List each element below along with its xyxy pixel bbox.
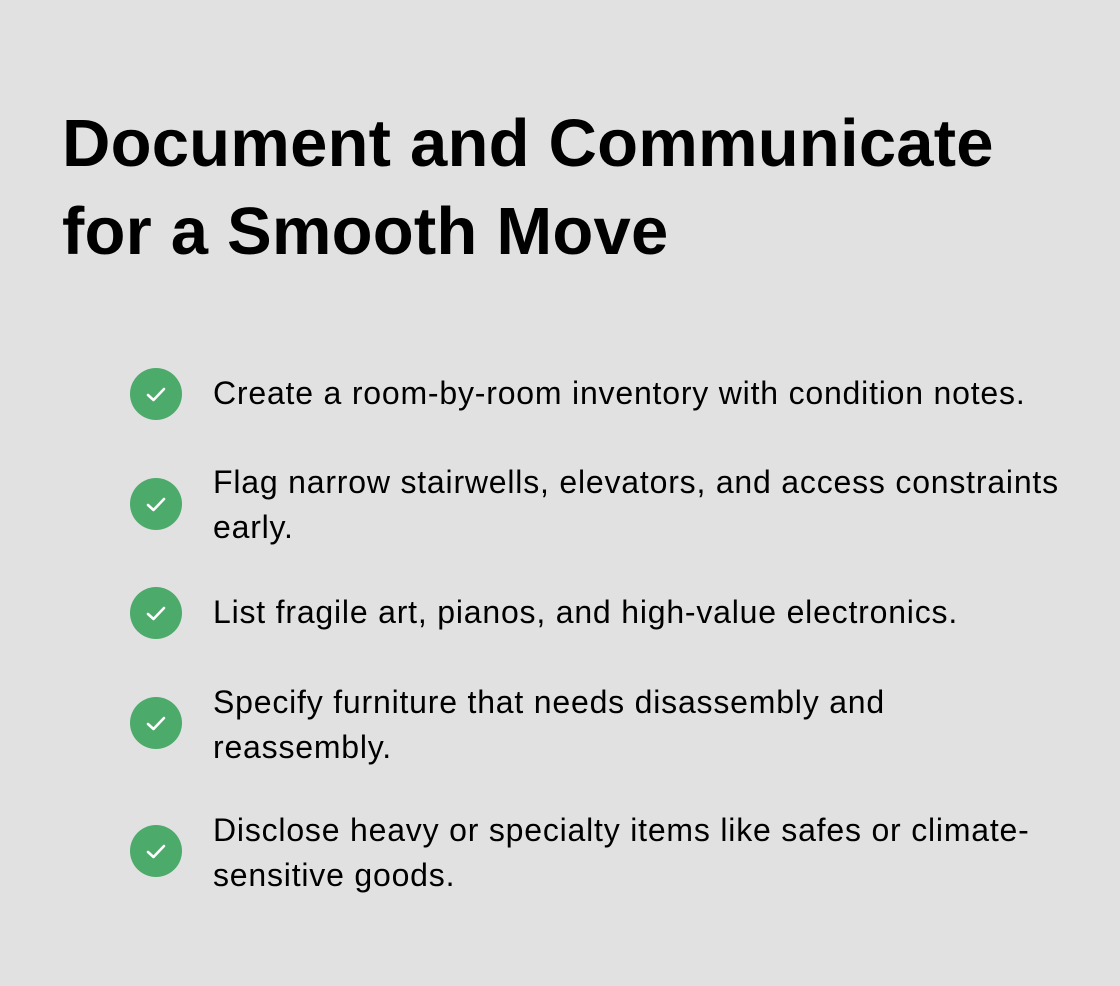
title: Document and Communicate (62, 106, 994, 181)
text 5: sensitive goods. (213, 857, 455, 893)
text 5 (213, 812, 1030, 893)
item 5 (130, 812, 1030, 893)
item 1 (130, 368, 1026, 420)
text 5: Disclose heavy or specialty items like safes or climate- (213, 812, 1030, 848)
item 3 (130, 587, 958, 639)
text 2: Flag narrow stairwells, elevators, and access constraints (213, 464, 1059, 500)
text 4 (213, 684, 885, 765)
text 1: Create a room-by-room inventory with condition notes. (213, 375, 1026, 411)
text 4: reassembly. (213, 729, 392, 765)
title (62, 106, 994, 269)
text 3: List fragile art, pianos, and high-value electronics. (213, 594, 958, 630)
item 2 (130, 464, 1059, 545)
icon: check (130, 825, 182, 877)
text 2: early. (213, 509, 294, 545)
icon: check (130, 478, 182, 530)
text 2 (213, 464, 1059, 545)
icon: check (130, 697, 182, 749)
title: for a Smooth Move (62, 194, 668, 269)
item 4 (130, 684, 885, 765)
icon: check (130, 587, 182, 639)
icon: check (130, 368, 182, 420)
text 4: Specify furniture that needs disassembly and (213, 684, 885, 720)
